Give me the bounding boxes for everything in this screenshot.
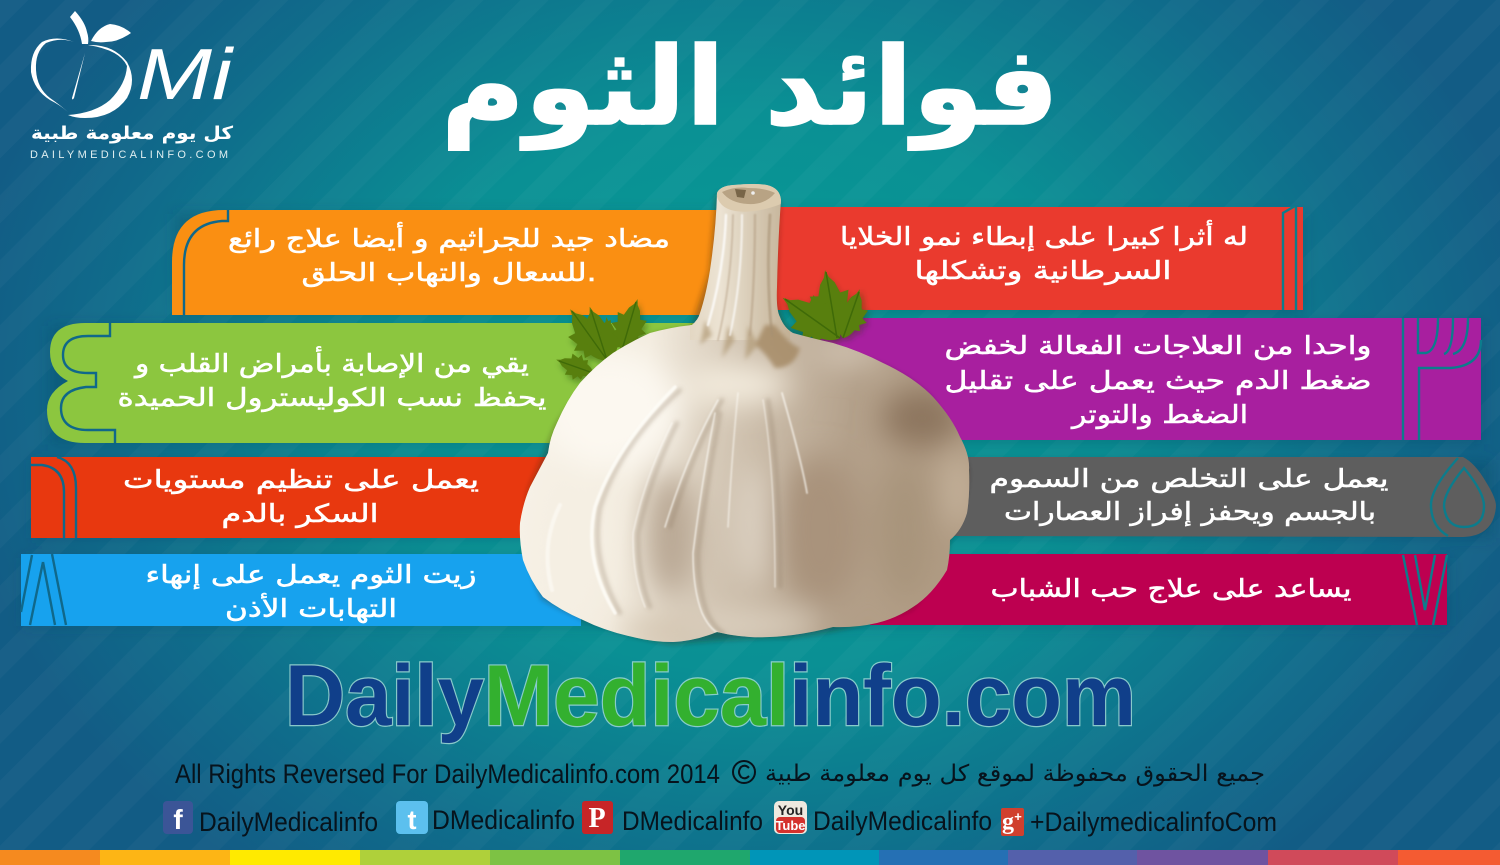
icon: youtube: You (778, 802, 803, 818)
text: purple panel: ضغط الدم حيث يعمل على تقليل (944, 366, 1372, 395)
icon: parsley left (552, 294, 657, 389)
text: grey panel: بالجسم ويحفز إفراز العصارات (1004, 497, 1376, 527)
label: twitter: DMedicalinfo (432, 805, 575, 835)
logo text Mi: Mi (137, 35, 234, 115)
text: blue panel: زيت الثوم يعمل على إنهاء (146, 560, 476, 590)
stem cap (716, 184, 781, 212)
text: orange-red panel: السكر بالدم (222, 499, 378, 528)
icon: facebook (163, 801, 193, 835)
panel: blue ear (21, 554, 581, 626)
title: فوائد الثوم (441, 25, 1059, 151)
label: pinterest: DMedicalinfo (622, 806, 763, 836)
logo url: DAILYMEDICALINFO.COM (30, 149, 228, 161)
icon: twitter: t (408, 805, 416, 835)
panel: grey detox (930, 457, 1496, 537)
logo: Daily Medical Info (30, 11, 234, 161)
label: facebook: DailyMedicalinfo (199, 807, 378, 837)
text: green panel: يقي من الإصابة بأمراض القلب و (133, 345, 529, 379)
copyright arabic: جميع الحقوق محفوظة لموقع كل يوم معلومة طبية (765, 761, 1265, 787)
stem base shading (700, 320, 800, 368)
icon: apple (31, 11, 132, 118)
icon: pinterest: P (588, 803, 606, 834)
text: blue panel (146, 560, 476, 624)
text: purple panel: الضغط والتوتر (1070, 400, 1248, 430)
text: orange-red panel: يعمل على تنظيم مستويات (123, 465, 479, 495)
garlic rib shadows (598, 390, 780, 633)
text: green panel (118, 345, 547, 413)
icon: parsley right (769, 266, 879, 360)
copyright line (175, 759, 1265, 789)
illustration: garlic bulb (510, 180, 980, 650)
copyright english: All Rights Reversed For DailyMedicalinfo.com 2014 (175, 759, 720, 789)
text: red panel: له أثرا كبيرا على إبطاء نمو الخلايا (840, 219, 1248, 252)
panel: orange-red blood sugar (31, 457, 571, 538)
label: google plus: +DailymedicalinfoCom (1030, 807, 1277, 837)
panel: green heart (47, 323, 700, 443)
icon: google plus: + (1014, 809, 1022, 824)
text: purple panel (944, 331, 1372, 430)
icon: copyright (733, 761, 755, 783)
icon: twitter (396, 801, 428, 835)
website logotype: DailyMedicalinfo.com (285, 648, 1136, 744)
text: orange panel (228, 221, 670, 288)
logo tagline arabic: كل يوم معلومة طبية (31, 123, 234, 144)
icon: facebook: f (173, 804, 183, 835)
text: green panel: يحفظ نسب الكوليسترول الحميدة (118, 383, 547, 413)
icon: google plus: g (1002, 809, 1014, 835)
text: purple panel: واحدا من العلاجات الفعالة لخفض (944, 331, 1372, 361)
text: blue panel: التهابات الأذن (225, 592, 397, 624)
bulb shading (532, 340, 970, 642)
panel: purple blood pressure (820, 318, 1481, 440)
icon: google plus (1001, 808, 1024, 836)
panel: red cancer cells (775, 206, 1303, 310)
panel: orange antibacterial (172, 210, 720, 315)
text: grey panel: يعمل على التخلص من السموم (990, 464, 1389, 493)
icon: youtube (774, 801, 807, 834)
stem (690, 180, 790, 340)
rainbow footer bar (0, 850, 1500, 865)
social row (163, 801, 1277, 837)
icon: youtube: Tube (775, 818, 806, 833)
stem ribs (708, 215, 772, 340)
panel: crimson acne (870, 554, 1447, 625)
panel shadows (24, 214, 1494, 626)
text: orange panel: للسعال والتهاب الحلق. (302, 258, 596, 288)
label: youtube: DailyMedicalinfo (813, 806, 992, 836)
text: orange-red panel (123, 465, 479, 528)
text: grey panel (990, 464, 1389, 527)
text: red panel (840, 219, 1248, 286)
text: red panel: السرطانية وتشكلها (914, 256, 1172, 286)
text: orange panel: مضاد جيد للجراثيم و أيضا علاج رائع (228, 221, 670, 254)
garlic shadow (526, 191, 968, 644)
text: crimson panel: يساعد على علاج حب الشباب (990, 574, 1352, 604)
icon: pinterest (582, 801, 613, 834)
garlic rib highlights (548, 387, 807, 633)
